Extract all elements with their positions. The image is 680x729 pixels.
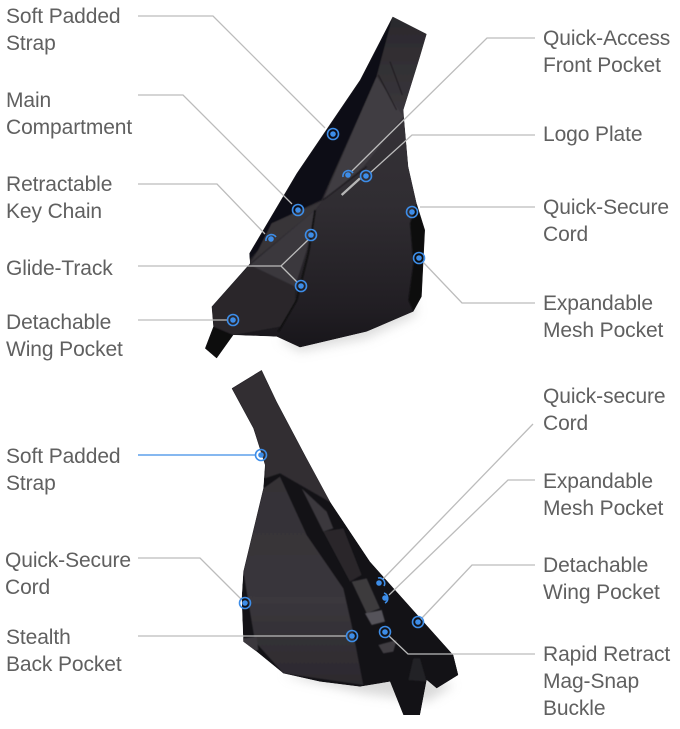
label: Main Compartment: Main [6, 89, 51, 112]
label: Quick-Secure Cord: Cord [543, 223, 588, 246]
label: Expandable Mesh Pocket (back): Mesh Pocket [543, 497, 664, 520]
label: Expandable Mesh Pocket: Expandable [543, 292, 653, 315]
bag: back view [232, 370, 458, 715]
label: Detachable Wing Pocket (back): Detachable [543, 554, 648, 577]
label: Soft Padded Strap: Soft Padded [6, 5, 120, 28]
label: Quick-secure Cord (back): Quick-secure [543, 385, 666, 408]
label: Rapid Retract Mag-Snap Buckle: Buckle [543, 697, 605, 720]
leader lines: front view [138, 16, 535, 320]
label: Retractable Key Chain: Retractable [6, 173, 112, 196]
label: Logo Plate: Logo Plate [543, 123, 642, 146]
markers: back view [240, 450, 424, 642]
label: Soft Padded Strap: Strap [6, 32, 56, 55]
markers: front view [228, 128, 424, 326]
bag: front view [205, 17, 427, 358]
label: Expandable Mesh Pocket (back): Expandable [543, 470, 653, 493]
label: Main Compartment: Compartment [6, 116, 132, 139]
label: Detachable Wing Pocket: Wing Pocket [6, 338, 123, 361]
label: Rapid Retract Mag-Snap Buckle: Rapid Retract [543, 643, 670, 666]
label: Stealth Back Pocket: Stealth [6, 626, 71, 649]
label: Quick-secure Cord (back): Cord [543, 412, 588, 435]
label: Quick-Access Front Pocket: Front Pocket [543, 54, 661, 77]
label: Quick-Access Front Pocket: Quick-Access [543, 27, 670, 50]
label: Soft Padded Strap (back): Strap [6, 472, 56, 495]
label: Glide-Track: Glide-Track [6, 257, 113, 280]
label: Rapid Retract Mag-Snap Buckle: Mag-Snap [543, 670, 639, 693]
label: Quick-Secure Cord: Quick-Secure [543, 196, 669, 219]
label: Detachable Wing Pocket (back): Wing Pocket [543, 581, 660, 604]
leader lines: back view [138, 424, 535, 654]
label: Quick-Secure Cord (back): Cord [5, 576, 50, 599]
label: Expandable Mesh Pocket: Mesh Pocket [543, 319, 664, 342]
label: Retractable Key Chain: Key Chain [6, 200, 102, 223]
label: Detachable Wing Pocket: Detachable [6, 311, 111, 334]
label: Soft Padded Strap (back): Soft Padded [6, 445, 120, 468]
label: Stealth Back Pocket: Back Pocket [6, 653, 122, 676]
label: Quick-Secure Cord (back): Quick-Secure [5, 549, 131, 572]
